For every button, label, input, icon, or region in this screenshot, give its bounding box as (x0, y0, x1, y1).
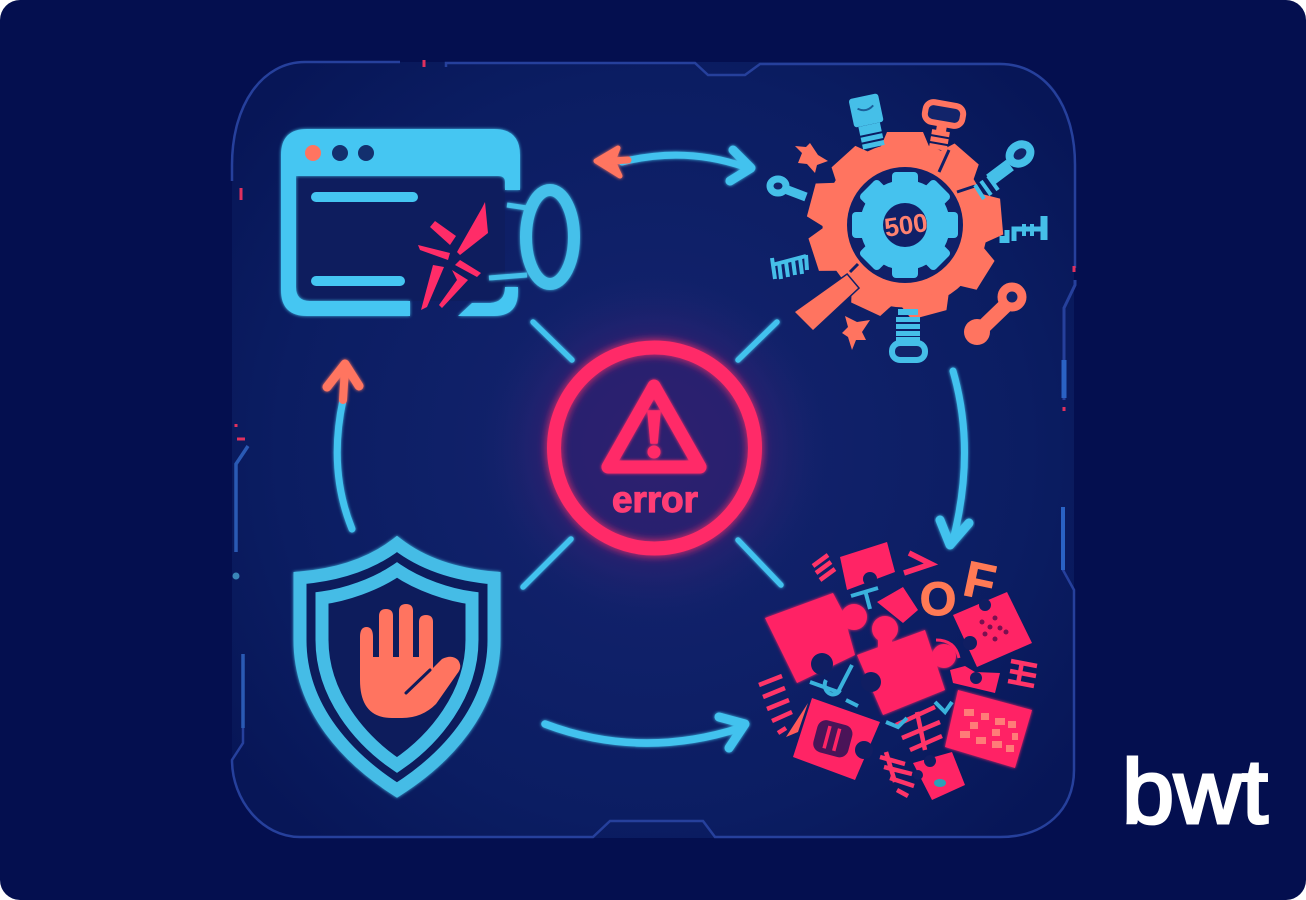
window dots (305, 145, 321, 161)
error label: error (612, 479, 698, 520)
outer coral gear (805, 132, 1004, 322)
puzzle piece lower left (793, 698, 880, 780)
letter O: O (920, 572, 956, 625)
inner blue gear (847, 167, 963, 283)
blue wrench upper right (975, 140, 1034, 199)
puzzle piece lower right (945, 690, 1032, 768)
icon: broken browser window (281, 129, 574, 316)
chevron glyph (904, 553, 931, 573)
arrow: shield to puzzle (545, 717, 745, 748)
puzzle piece bottom (913, 752, 965, 800)
coral wedge fragment (786, 703, 808, 737)
puzzle arc (936, 640, 959, 658)
coral bolt top (919, 101, 964, 153)
blue spring left (772, 255, 807, 279)
broken ring connector (489, 190, 574, 284)
coral chisel lower left (795, 275, 858, 330)
browser frame (296, 176, 505, 301)
icon: shield with stop hand (300, 544, 494, 790)
shield outlines (300, 544, 494, 790)
puzzle piece small notch (950, 666, 1000, 693)
icon: scattered puzzle pieces (759, 542, 1037, 800)
coral fragment lower (842, 316, 870, 350)
arrow: shield to browser (327, 364, 359, 529)
blue bolt top left (848, 93, 889, 150)
blue bolt bottom (892, 309, 925, 360)
warning triangle (608, 386, 700, 467)
blue wrench left (770, 179, 806, 197)
arrow: gear to puzzle (940, 371, 969, 545)
icon: broken gear 500 (770, 93, 1044, 360)
coral star fragment top (795, 143, 828, 173)
arrow: browser to gear (two-way) (596, 148, 751, 181)
coral wrench lower right (964, 287, 1022, 345)
connector lines to center (523, 322, 781, 587)
pink code fragments (759, 555, 1037, 796)
500 label: 500 (882, 207, 930, 243)
blue code fragments (810, 588, 952, 727)
error ring (554, 348, 755, 548)
puzzle piece left (765, 593, 867, 683)
center error badge (554, 348, 755, 548)
blue bolt right (1002, 216, 1044, 243)
letter F: F (959, 550, 1001, 612)
puzzle piece small (877, 587, 918, 623)
puzzle piece center (857, 616, 956, 715)
stop hand (360, 604, 460, 718)
puzzle piece right (953, 592, 1032, 667)
glowing pixels (960, 709, 1018, 752)
dark dots (980, 616, 1008, 642)
tech frame border (232, 60, 1075, 837)
crack shards (418, 202, 488, 310)
puzzle piece top (840, 542, 895, 590)
logo: bwt: bwt (1122, 742, 1268, 843)
content lines (311, 192, 418, 202)
gear cracks (850, 150, 975, 272)
